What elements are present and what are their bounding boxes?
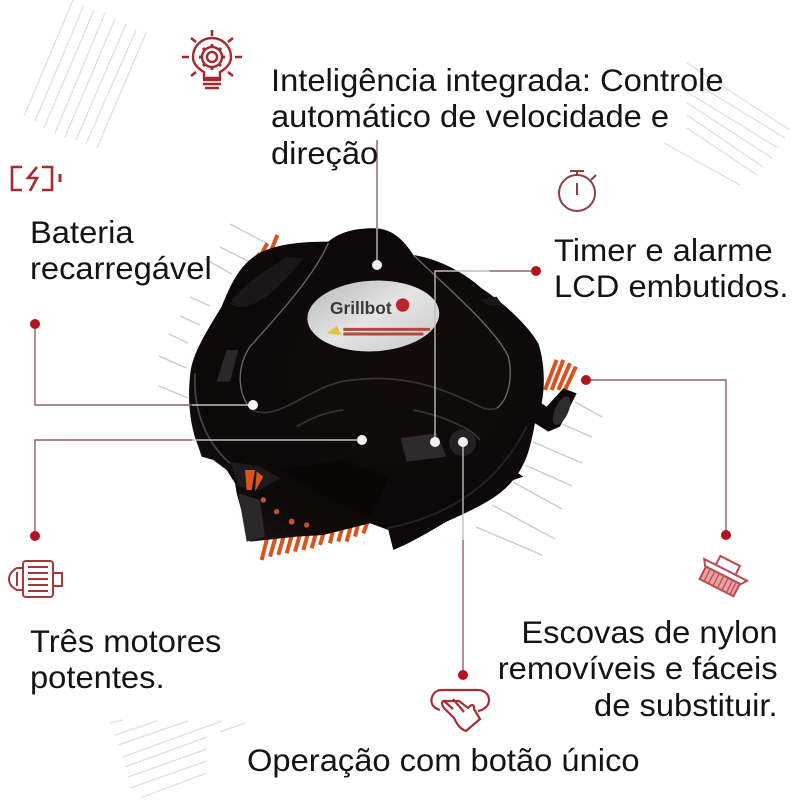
icon: hand pressing button bbox=[430, 688, 490, 732]
icon: stopwatch bbox=[558, 170, 597, 212]
text: timer and alarm bbox=[554, 232, 788, 304]
text: three motors: potentes. bbox=[30, 659, 165, 695]
text: built-in intelligence bbox=[271, 62, 724, 171]
text: rechargeable battery bbox=[30, 214, 212, 286]
text: rechargeable battery: recarregável bbox=[30, 250, 212, 286]
icon: cleaning brush bbox=[698, 554, 749, 598]
text: timer and alarm: Timer e alarme bbox=[554, 232, 773, 268]
icon: light bulb with gear bbox=[182, 30, 242, 90]
brand label bbox=[306, 277, 441, 355]
icon: motor bbox=[8, 560, 63, 598]
text: nylon brushes bbox=[498, 614, 778, 723]
text: built-in intelligence: automático de velocidade e bbox=[271, 98, 669, 134]
text: built-in intelligence: direção bbox=[271, 135, 378, 171]
text: nylon brushes: removíveis e fáceis bbox=[498, 650, 778, 686]
text: one-button operation: Operação com botão único bbox=[247, 742, 640, 778]
icon: charging battery bbox=[10, 166, 62, 192]
text: nylon brushes: Escovas de nylon bbox=[522, 614, 778, 650]
text: timer and alarm: LCD embutidos. bbox=[554, 268, 788, 304]
text: built-in intelligence: Inteligência integrada: Controle bbox=[271, 62, 724, 98]
brand label: Grillbot bbox=[330, 298, 392, 318]
text: three motors bbox=[30, 623, 221, 695]
text: three motors: Três motores bbox=[30, 623, 221, 659]
text: nylon brushes: de substituir. bbox=[594, 687, 778, 723]
text: rechargeable battery: Bateria bbox=[30, 214, 134, 250]
